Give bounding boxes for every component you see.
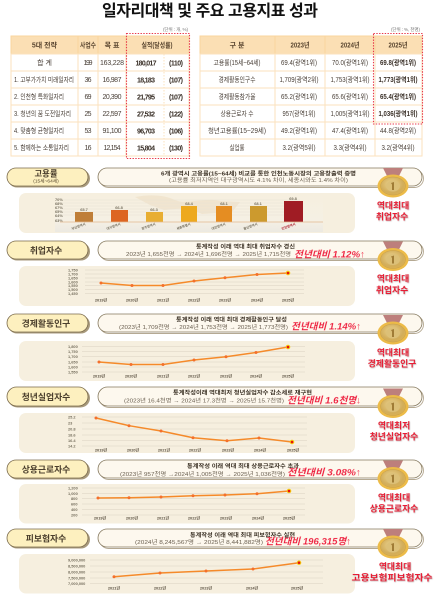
summary pill: 통계작성 이래 역대 최대 상용근로자수 초과 — [187, 462, 299, 470]
medal caption — [376, 200, 409, 222]
line chart: 2023년 — [222, 448, 235, 452]
dotted highlight box — [374, 34, 422, 124]
summary pill: (고용률 최저지역인 대구광역시도 4.1% 차이, 세종시와도 1.4% 차이) — [169, 176, 348, 184]
section: 상용근로자수 — [7, 460, 424, 524]
line chart: 2019년 — [95, 298, 108, 302]
table rows: 고용률(15세~64세) — [214, 58, 260, 67]
table rows: 49.2(광역1위) — [281, 126, 317, 135]
line chart: 2022년 — [188, 516, 201, 520]
table header: 2024년 — [340, 40, 360, 50]
line chart: 1,550 — [68, 370, 78, 374]
medal caption: 경제활동인구 — [368, 358, 416, 368]
table rows: 1,005(광역1위) — [330, 109, 370, 118]
line chart: 2024년 — [252, 516, 265, 520]
bar values: 69.8 — [289, 196, 298, 201]
bar values — [80, 196, 298, 212]
table rows: 2. 인천형 특화일자리 — [14, 92, 64, 101]
medal caption: 역대최저 — [378, 420, 410, 430]
table rows: 실업률 — [230, 143, 245, 152]
line chart: 2025년 — [282, 374, 295, 378]
bar city labels: 인천광역시 — [281, 221, 296, 231]
line chart: 2020년 — [126, 298, 139, 302]
line chart: 400 — [71, 507, 78, 512]
table rows: 69.8(광역1위) — [380, 58, 416, 67]
year-on-year callout: 전년대비 1.14%↑ — [291, 322, 361, 332]
title: 일자리대책 및 주요 고용지표 성과 — [102, 2, 318, 20]
line chart: 14.2 — [68, 444, 76, 448]
line chart: 1,650 — [68, 276, 78, 280]
icon: medal — [378, 529, 408, 558]
label pill — [7, 314, 90, 334]
line chart: 18.6 — [68, 432, 76, 438]
bar chart panel: 70% — [55, 197, 63, 202]
table rows: 69 — [84, 94, 92, 101]
table header: 5대 전략 — [32, 40, 58, 50]
icon: medal — [378, 168, 408, 198]
unit note: (단위 : %, 천명) — [391, 26, 420, 33]
line chart: 2025년 — [291, 586, 304, 590]
bar city labels: 광주광역시 — [141, 221, 156, 231]
table rows: 12,154 — [104, 145, 121, 152]
label pill: 피보험자수 — [26, 532, 66, 544]
line chart: 1,000 — [68, 491, 78, 496]
table rows: 4. 맞춤형 균형일자리 — [14, 126, 64, 135]
bar values: 68.4 — [185, 201, 194, 206]
summary pill — [98, 460, 424, 480]
table rows: (106) — [169, 128, 183, 136]
bar values: 66.3 — [150, 207, 159, 212]
icon: medal — [378, 388, 408, 418]
table rows: 96,703 — [137, 128, 155, 136]
section: 고용률 — [7, 168, 424, 233]
line chart: 2025년 — [282, 298, 295, 302]
table rows: 65.4(광역1위) — [380, 92, 416, 101]
bar values: 65.7 — [80, 207, 88, 212]
bar city labels: 대구광역시 — [106, 221, 121, 231]
table rows: 47.4(광역1위) — [332, 126, 368, 135]
line chart: 2023년 — [220, 516, 233, 520]
table rows: 957(광역1위) — [282, 109, 316, 118]
line chart: 2022년 — [188, 298, 201, 302]
line chart: 2022년 — [188, 374, 201, 378]
table rows: 5. 함께하는 소통일자리 — [14, 143, 69, 152]
medal caption — [370, 420, 418, 442]
table rows: 36 — [84, 77, 92, 84]
bar city labels: 세종특별시 — [176, 221, 191, 231]
line chart: 2020년 — [126, 516, 139, 520]
summary pill: (2023년 957천명 →2024년 1,005천명 → 2025년 1,036천명) — [120, 470, 285, 478]
table rows: 70.0(광역1위) — [332, 58, 368, 67]
bars — [60, 201, 323, 222]
line chart: 1,600 — [68, 280, 78, 284]
year-on-year callout: 전년대비 1.12%↑ — [294, 250, 365, 260]
year-on-year callout: 전년대비 3.08%↑ — [287, 468, 361, 478]
table: 주요 고용지표 — [200, 26, 422, 156]
line chart: 2021년 — [158, 448, 171, 452]
table rows: (122) — [169, 112, 183, 118]
line chart: 2019년 — [94, 516, 107, 520]
table rows — [200, 54, 422, 156]
summary pill — [98, 529, 424, 548]
table rows: 53 — [84, 128, 92, 135]
line chart — [19, 554, 355, 594]
table rows: (130) — [169, 146, 183, 152]
line chart: 2024년 — [246, 586, 259, 590]
summary pill — [98, 387, 424, 408]
line chart: 2023년 — [200, 586, 213, 590]
summary pill — [98, 168, 424, 188]
summary pill: 통계작성 이래 역대 최대 취업자수 경신 — [196, 242, 295, 250]
table rows: 25 — [84, 111, 92, 118]
table header: 2023년 — [290, 40, 310, 50]
table rows: 3.2(광역5위) — [282, 143, 316, 152]
summary pill: (2024년 8,245,567명 → 2025년 8,441,882명) — [135, 538, 263, 546]
summary pill: (2023년 16.4천명 → 2024년 17.3천명 → 2025년 15.7천명) — [124, 396, 284, 404]
table rows: 1,709(광역2위) — [280, 75, 318, 84]
line chart: 2021년 — [108, 586, 121, 590]
label pill: (15세~64세) — [33, 178, 59, 184]
table header: 구 분 — [230, 42, 245, 50]
table rows: 44.8(광역2위) — [380, 126, 416, 135]
line chart: 1,800 — [68, 344, 78, 349]
label pill: 청년실업자수 — [22, 391, 70, 402]
table rows: 1,036(광역1위) — [378, 109, 418, 118]
medal caption: 역대최대 — [377, 272, 409, 284]
bar chart panel: 68% — [55, 201, 63, 206]
medal caption: 취업자수 — [376, 210, 408, 222]
line chart: 8,000,000 — [68, 570, 85, 574]
table rows: 1,773(광역1위) — [378, 75, 418, 84]
line chart: 2021년 — [157, 374, 170, 378]
summary pill: 통계작성이래 역대최저 청년실업자수 감소세로 재구현 — [173, 388, 312, 396]
line chart: 20.8 — [68, 426, 76, 432]
table rows: 15,804 — [137, 146, 155, 152]
line chart: 1,600 — [68, 364, 78, 370]
year-on-year callout: 전년대비 1.6천명↓ — [287, 396, 361, 406]
table rows: 3.3(광역4위) — [334, 143, 366, 152]
medal caption: 역대최대 — [377, 346, 409, 358]
bar city labels — [71, 221, 296, 231]
line chart: 2022년 — [189, 448, 202, 452]
table rows: 20,390 — [102, 94, 122, 101]
line chart: 2024년 — [250, 374, 263, 378]
table rows: 합 계 — [37, 58, 52, 67]
summary pill — [98, 314, 424, 334]
label pill: 취업자수 — [30, 244, 62, 256]
medal caption: 고용보험피보험자수 — [352, 572, 432, 582]
table header: 2025년 — [388, 40, 408, 50]
bar values: 66.8 — [115, 205, 124, 210]
line chart — [19, 341, 355, 381]
medal caption: 역대최대 — [378, 492, 410, 502]
section: 청년실업자수 — [7, 387, 424, 453]
summary pill: (2023년 1,709천명 → 2024년 1,753천명 → 2025년 1,773천명) — [119, 323, 288, 331]
bar chart panel: 64% — [55, 213, 63, 218]
table header — [200, 36, 422, 54]
table rows: 21,795 — [137, 94, 155, 102]
bar city labels: 부산광역시 — [71, 221, 86, 231]
label pill — [7, 241, 90, 260]
medal caption: 청년실업자수 — [370, 430, 418, 442]
line chart: 2019년 — [93, 374, 106, 378]
table rows: 199 — [84, 60, 93, 67]
table rows: 65.2(광역1위) — [281, 92, 317, 101]
line chart: 1,450 — [68, 291, 78, 296]
summary pill — [98, 241, 424, 260]
table header: 목 표 — [105, 42, 120, 50]
line chart: 200 — [71, 512, 78, 518]
section: 경제활동인구 — [7, 314, 424, 381]
line chart: 2024년 — [254, 448, 267, 452]
line chart — [19, 266, 355, 306]
bar city labels: 울산광역시 — [243, 221, 258, 231]
medal caption: 역대최대 — [379, 560, 411, 572]
line chart: 1,500 — [68, 287, 78, 292]
bar values: 68.1 — [220, 201, 229, 206]
table rows: 18,183 — [137, 78, 155, 84]
icon: medal — [378, 242, 408, 271]
line chart: 2025년 — [283, 516, 296, 520]
bar values: 68.1 — [254, 201, 263, 206]
summary pill: 통계작성 이래 역대 최대 경제활동인구 달성 — [176, 316, 287, 324]
line chart: 1,750 — [68, 268, 78, 272]
line chart: 2023년 — [220, 374, 233, 378]
line chart: 2025년 — [287, 448, 300, 452]
table rows: 180,017 — [136, 60, 157, 68]
table rows — [11, 54, 189, 156]
label pill — [7, 529, 90, 548]
summary pill: 2023년 1,655천명 → 2024년 1,696천명 → 2025년 1,715천명 — [126, 250, 291, 258]
table rows: 3. 청년의 꿈 도전일자리 — [14, 109, 71, 118]
table header: 사업수 — [80, 40, 96, 50]
table rows: 27,532 — [137, 112, 155, 118]
dotted highlight box — [126, 34, 190, 158]
line chart: 600 — [71, 502, 78, 506]
table rows: 3.2(광역4위) — [382, 143, 414, 152]
icon: medal — [378, 460, 408, 490]
bar chart panel — [19, 193, 355, 233]
line chart — [19, 484, 355, 524]
label pill — [7, 168, 90, 188]
medal caption: 상용근로자수 — [370, 502, 418, 514]
section: 피보험자수 — [7, 529, 432, 594]
line chart: 800 — [71, 496, 78, 501]
table rows: 22,597 — [102, 111, 122, 118]
table rows: 65.6(광역1위) — [332, 92, 368, 101]
unit note: (단위 : 개, %) — [163, 26, 188, 33]
table rows: 163,228 — [100, 60, 124, 67]
medal caption: 취업자수 — [376, 284, 408, 295]
table header: 실적(달성률) — [142, 40, 172, 50]
bar city labels: 대전광역시 — [211, 221, 226, 231]
label pill: 고용률 — [35, 168, 58, 178]
line chart: 1,200 — [68, 486, 78, 490]
line chart: 2024년 — [251, 298, 264, 302]
icon: medal — [378, 315, 408, 344]
label pill: 경제활동인구 — [22, 318, 70, 328]
medal caption — [352, 560, 432, 582]
table rows: (107) — [169, 94, 183, 102]
table rows: 청년고용률(15~29세) — [208, 126, 266, 135]
bar chart panel: 67% — [55, 205, 63, 210]
line chart: 2022년 — [154, 586, 167, 590]
line chart: 7,500,000 — [68, 576, 85, 580]
line chart: 2021년 — [157, 298, 170, 302]
summary pill: 통계작성 이래 역대 최대 피보험자수 실현 — [190, 531, 295, 539]
bar chart panel: 63% — [55, 218, 63, 223]
summary pill: 6개 광역시 고용률(15~64세) 비교를 통한 인천노동시장의 고용창출력 증명 — [161, 170, 356, 178]
table rows: 경제활동참가율 — [218, 92, 256, 101]
table rows: (110) — [169, 60, 183, 68]
bar chart panel: 65% — [55, 209, 63, 214]
table rows: 1. 고부가가치 미래일자리 — [14, 75, 74, 84]
line chart: 2021년 — [157, 516, 170, 520]
line chart: 2019년 — [95, 448, 108, 452]
line chart: 1,650 — [68, 360, 78, 364]
medal caption — [370, 492, 418, 514]
table rows: 경제활동인구수 — [218, 75, 256, 84]
table rows: 69.4(광역1위) — [281, 58, 317, 67]
line chart: 2020년 — [125, 374, 138, 378]
table rows: 1,753(광역1위) — [330, 75, 370, 84]
label pill: 상용근로자수 — [22, 464, 70, 474]
line chart: 7,000,000 — [68, 581, 85, 586]
table header — [11, 36, 189, 54]
line chart: 2023년 — [219, 298, 232, 302]
line chart — [19, 413, 355, 453]
label pill — [7, 460, 90, 480]
table rows: 16,987 — [102, 77, 122, 84]
line chart: 1,750 — [68, 349, 78, 354]
line chart: 16.4 — [68, 438, 76, 443]
line chart: 25.2 — [68, 414, 76, 420]
label pill — [7, 387, 90, 408]
medal caption — [368, 346, 416, 368]
table rows: 상용근로자 수 — [220, 109, 254, 118]
table rows: (107) — [169, 78, 183, 84]
medal caption — [376, 272, 409, 295]
line chart: 9,000,000 — [68, 558, 85, 562]
table rows: 91,100 — [102, 128, 122, 135]
line chart: 1,550 — [68, 283, 78, 288]
table rows: 16 — [84, 145, 92, 152]
section: 취업자수 — [7, 241, 424, 306]
line chart: 23 — [68, 420, 73, 426]
line chart: 2020년 — [127, 448, 140, 452]
year-on-year callout: 전년대비 196,315명↑ — [265, 536, 351, 548]
table: 5대 전략 실적 — [11, 26, 190, 158]
line chart: 1,700 — [68, 272, 78, 276]
line chart: 1,700 — [68, 354, 78, 359]
medal caption: 역대최대 — [377, 200, 409, 210]
line chart: 8,500,000 — [68, 564, 85, 568]
